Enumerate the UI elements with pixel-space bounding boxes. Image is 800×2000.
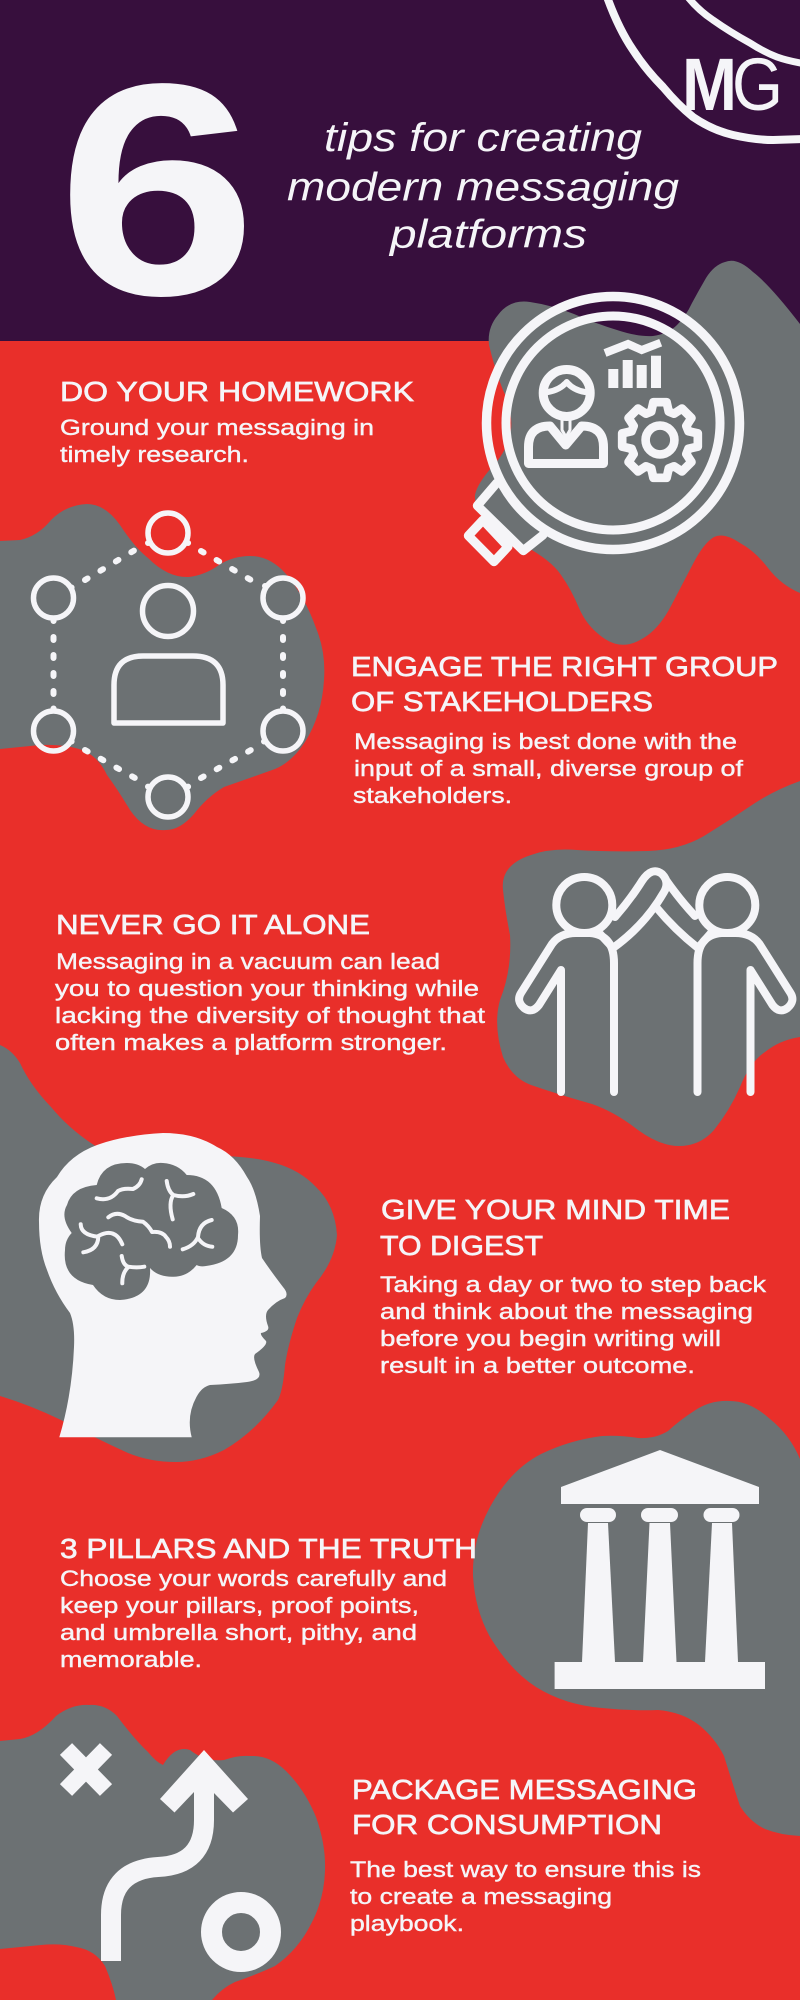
icon: stakeholder network: [34, 513, 303, 817]
tip 3 text: NEVER GO IT ALONE: [56, 909, 370, 940]
title: tips for creating modern messaging platforms: [287, 116, 679, 256]
tip 5 text: and umbrella short, pithy, and: [60, 1620, 417, 1645]
tip 5 text: 3 PILLARS AND THE TRUTH: [60, 1533, 477, 1564]
tip 4 text: Taking a day or two to step back: [380, 1272, 767, 1297]
tip 3 text: often makes a platform stronger.: [55, 1030, 447, 1055]
tip 4 text: TO DIGEST: [380, 1230, 543, 1261]
tip 5 text: Choose your words carefully and: [60, 1566, 447, 1591]
tip 2 text: OF STAKEHOLDERS: [351, 686, 653, 717]
tip 6 text: playbook.: [350, 1911, 464, 1936]
tip 6 text: FOR CONSUMPTION: [352, 1809, 662, 1840]
tip 5 text: memorable.: [60, 1647, 202, 1672]
tip 5 text: [60, 1533, 477, 1672]
icon: head with brain: [39, 1133, 287, 1437]
tip 2 text: Messaging is best done with the: [354, 729, 737, 754]
title: tips for creating modern messaging platforms: modern messaging: [287, 166, 679, 210]
tip 2 text: input of a small, diverse group of: [354, 756, 744, 781]
logo: MG with curves: G: [732, 43, 783, 126]
icon: magnifier with person, chart and gear: [468, 296, 740, 562]
tip 2 text: [351, 651, 778, 808]
logo: MG with curves: [606, 0, 800, 140]
background blob: brain: [0, 1045, 337, 1462]
icon: classical pillars: [555, 1450, 765, 1689]
icon: two people high five: [519, 871, 792, 1092]
title: tips for creating modern messaging platforms: platforms: [389, 212, 587, 256]
tip 3 text: Messaging in a vacuum can lead: [56, 949, 440, 974]
tip 6 text: to create a messaging: [350, 1884, 612, 1909]
tip 1 text: timely research.: [60, 442, 249, 467]
logo: MG with curves: M: [682, 43, 737, 126]
tip 4 text: GIVE YOUR MIND TIME: [381, 1194, 730, 1225]
tip 3 text: lacking the diversity of thought that: [55, 1003, 486, 1028]
tip 3 text: you to question your thinking while: [55, 976, 479, 1001]
big number 6: 6: [57, 21, 257, 358]
tip 2 text: ENGAGE THE RIGHT GROUP: [351, 651, 778, 682]
title: tips for creating modern messaging platforms: tips for creating: [324, 116, 642, 160]
background blob: people: [497, 781, 800, 1146]
icon: strategy play with x, arrow and o: [66, 1749, 270, 1962]
tip 5 text: keep your pillars, proof points,: [60, 1593, 419, 1618]
tip 3 text: [55, 909, 486, 1055]
background blob: strategy: [0, 1705, 325, 2000]
header band: [0, 0, 800, 341]
tip 2 text: stakeholders.: [353, 783, 512, 808]
tip 6 text: PACKAGE MESSAGING: [352, 1774, 697, 1805]
tip 6 text: The best way to ensure this is: [350, 1857, 701, 1882]
background blob: pillars: [473, 1401, 800, 1836]
tip 4 text: and think about the messaging: [380, 1299, 753, 1324]
tip 6 text: [350, 1774, 701, 1936]
background blob: stakeholders: [0, 504, 324, 830]
tip 4 text: [380, 1194, 767, 1378]
tip 1 text: [60, 376, 415, 467]
tip 4 text: before you begin writing will: [380, 1326, 721, 1351]
background blob: top right: [475, 261, 800, 645]
tip 1 text: DO YOUR HOMEWORK: [60, 376, 415, 407]
tip 1 text: Ground your messaging in: [60, 415, 374, 440]
tip 4 text: result in a better outcome.: [380, 1353, 695, 1378]
